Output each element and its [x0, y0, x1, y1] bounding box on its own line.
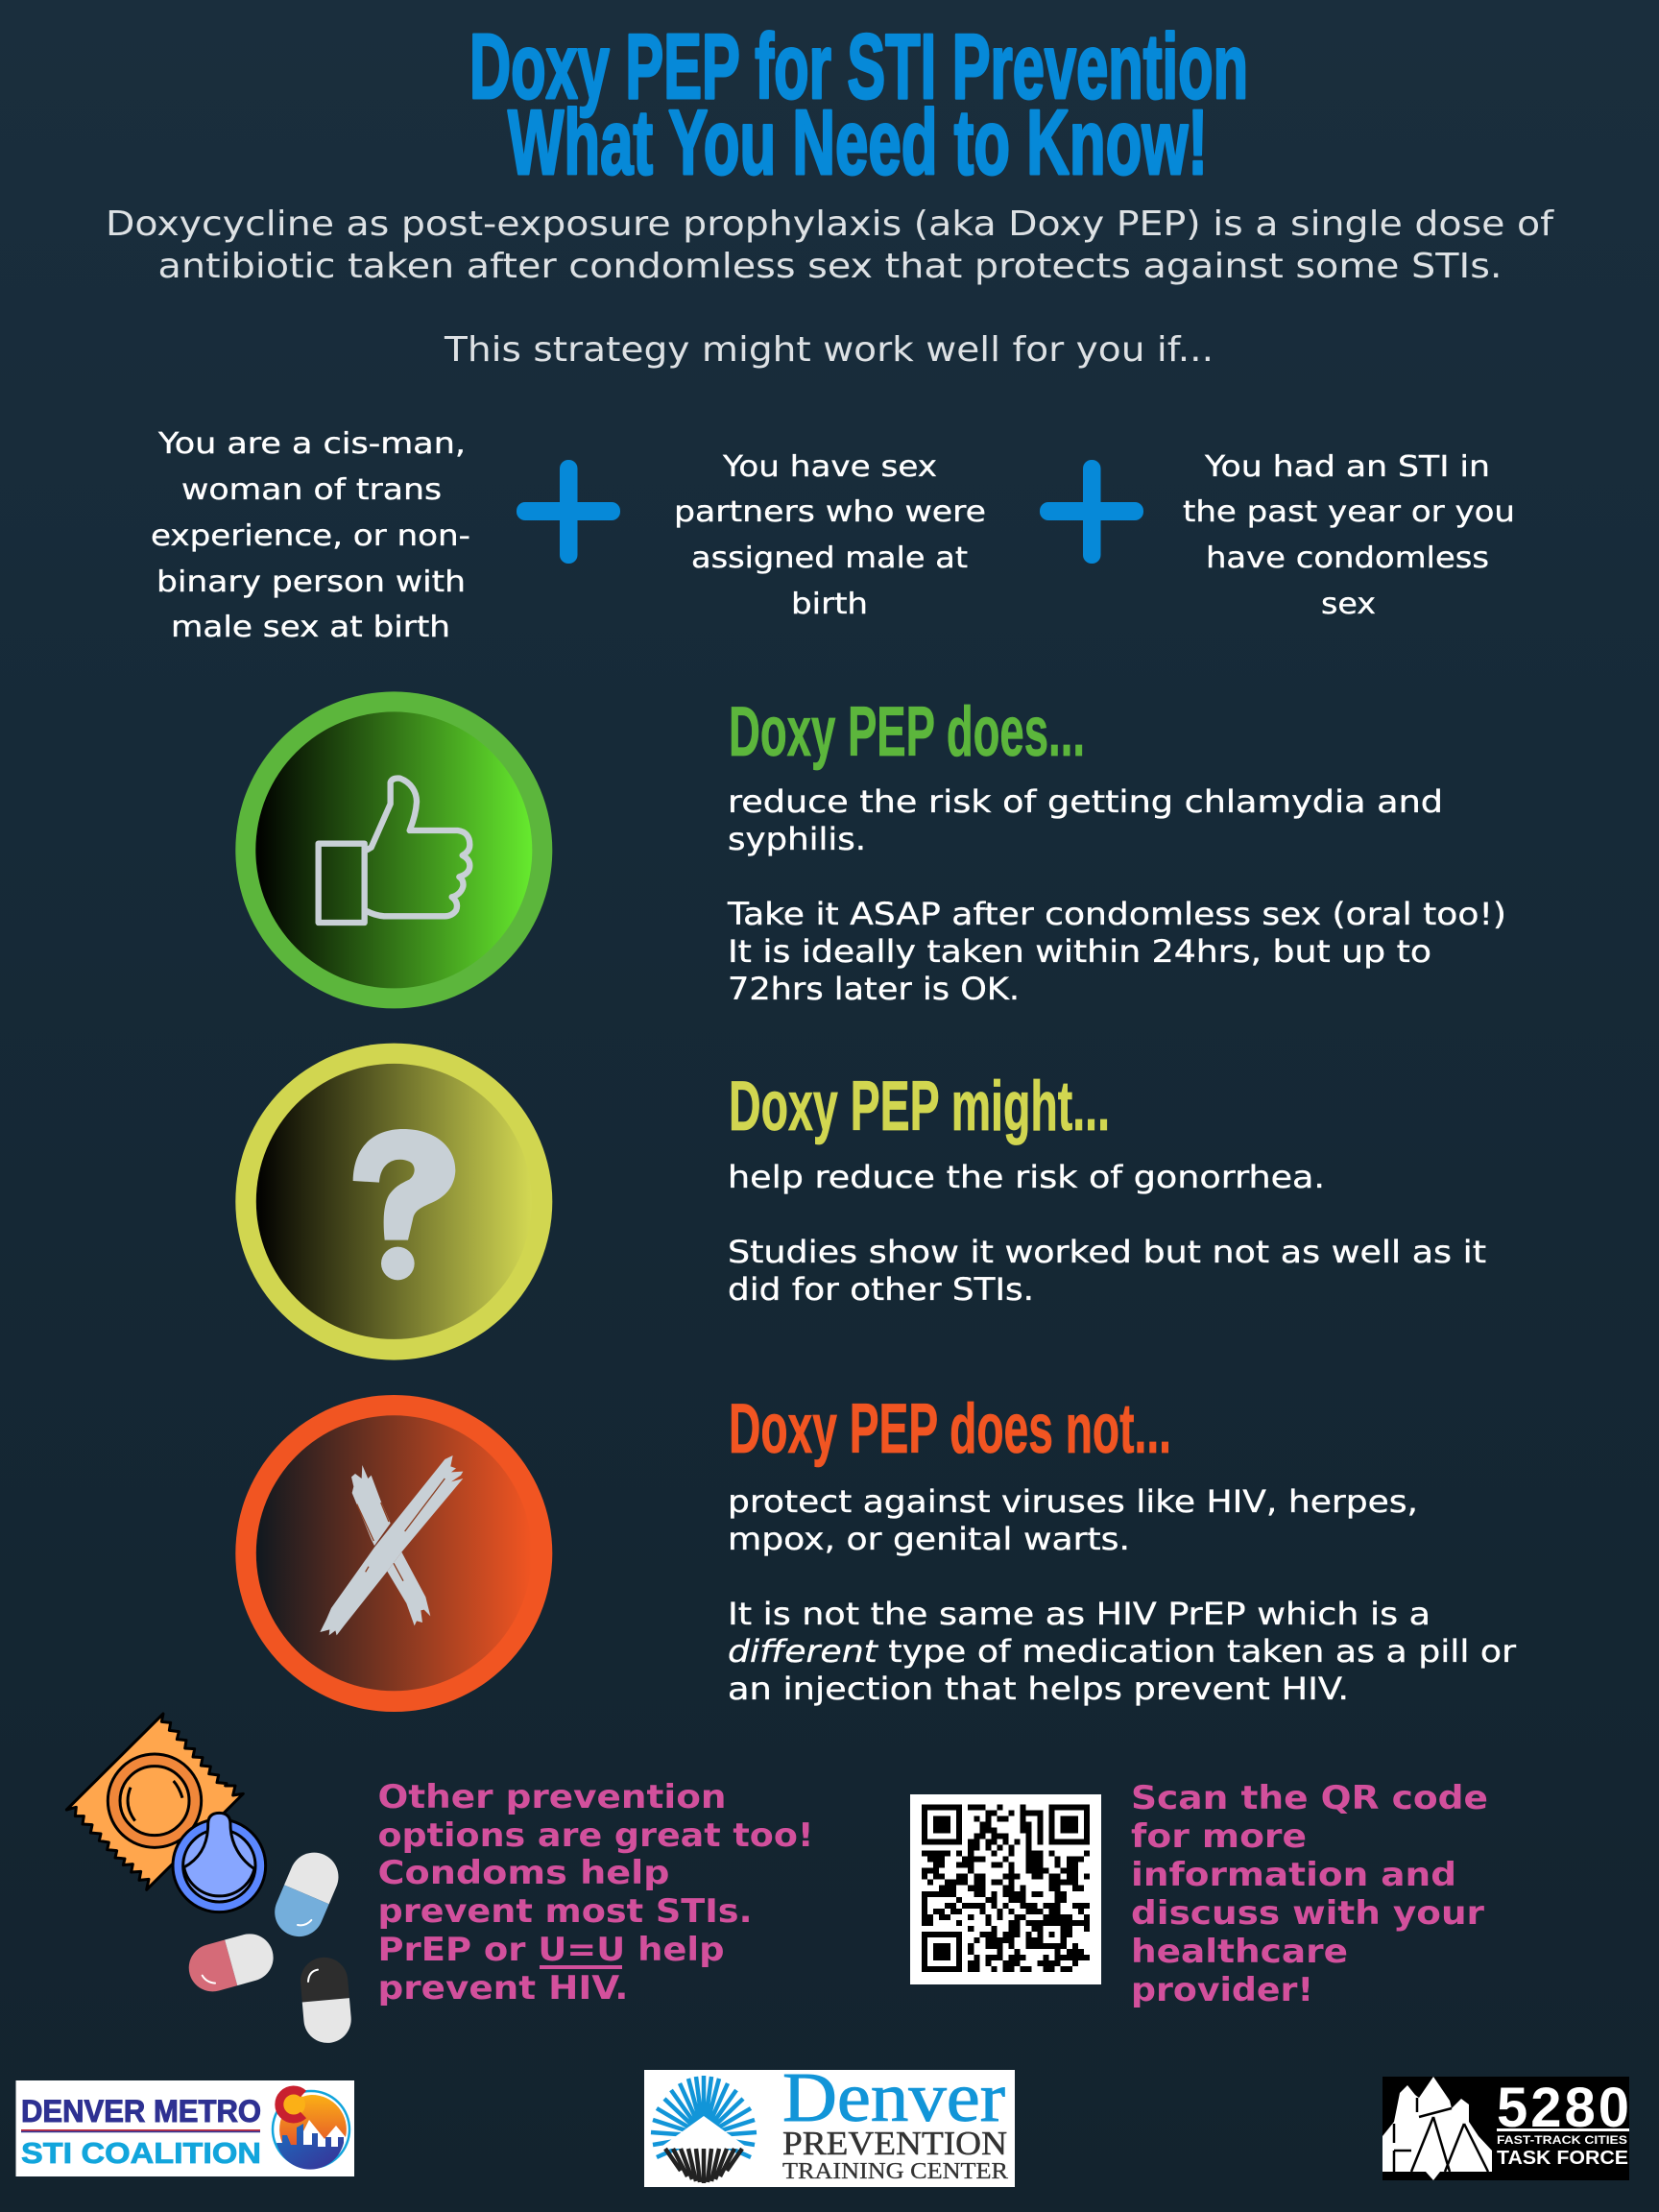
text: scan QR code: Scan the QR code — [1131, 1779, 1488, 1817]
logo: Denver Prevention Training Center: TRAINING CENTER — [782, 2159, 1008, 2184]
text: does not: protect against viruses like HIV, herpes, — [728, 1483, 1418, 1520]
plus icon — [1040, 460, 1143, 564]
logo: 5280 Fast-Track Cities Task Force: 5280 — [1497, 2077, 1629, 2139]
condom wrapper — [66, 1714, 243, 1889]
text: scan QR code: provider! — [1131, 1971, 1313, 2009]
logo: Denver Metro STI Coalition — [15, 2080, 354, 2176]
text: scan QR code: for more — [1131, 1817, 1307, 1856]
criterion: recent STI: sex — [1321, 588, 1376, 621]
black capsule — [299, 1956, 353, 2045]
sunburst mark — [651, 2076, 757, 2183]
criterion: recent STI: You had an STI in — [1204, 450, 1490, 484]
blue capsule — [267, 1845, 346, 1944]
logo: Denver Prevention Training Center: PREVENTION — [782, 2125, 1007, 2162]
logo: Denver Metro STI Coalition: STI COALITION — [21, 2136, 261, 2170]
intro text: Doxycycline as post-exposure prophylaxis (aka Doxy PEP) is a single dose of — [106, 204, 1554, 244]
logo: 5280 Fast-Track Cities Task Force — [1382, 2077, 1629, 2180]
text: does not: mpox, or genital warts. — [728, 1521, 1130, 1557]
text: scan QR code — [1131, 1779, 1488, 2009]
icon: thumbs up badge — [235, 691, 552, 1008]
criterion: recent STI — [1183, 450, 1515, 621]
criterion: identity: You are a cis-man, — [157, 427, 466, 461]
icon: X badge — [235, 1395, 552, 1712]
text: other prevention options: options are great too! — [378, 1816, 814, 1855]
unrolled condom — [173, 1813, 266, 1912]
criterion: partners: You have sex — [722, 450, 937, 484]
heading: does: Doxy PEP does... — [729, 693, 1085, 771]
text: might: Studies show it worked but not as well as it — [728, 1234, 1486, 1270]
logo: Denver Prevention Training Center — [644, 2058, 1015, 2187]
text: other prevention options: PrEP or U=U help — [378, 1931, 724, 1969]
plus icon — [517, 460, 620, 564]
heading: might: Doxy PEP might... — [729, 1068, 1110, 1145]
logo: 5280 Fast-Track Cities Task Force: FAST-TRACK CITIES — [1497, 2133, 1627, 2147]
text: other prevention options: Condoms help — [378, 1854, 670, 1892]
intro text — [106, 204, 1554, 286]
Colorado emblem — [273, 2090, 349, 2170]
intro text: antibiotic taken after condomless sex that protects against some STIs. — [157, 247, 1503, 286]
text: might: help reduce the risk of gonorrhea. — [728, 1159, 1325, 1195]
logo: 5280 Fast-Track Cities Task Force: TASK FORCE — [1497, 2148, 1628, 2169]
criterion: partners: assigned male at — [691, 541, 968, 575]
text: does: It is ideally taken within 24hrs, but up to — [728, 933, 1431, 970]
text: does not: It is not the same as HIV PrEP which is a — [728, 1596, 1431, 1632]
mountains mark — [1382, 2077, 1492, 2180]
criterion: partners: birth — [791, 588, 868, 621]
title — [469, 15, 1248, 194]
strategy lead-in: This strategy might work well for you if... — [444, 330, 1214, 370]
icon: condom and pills illustration — [66, 1714, 353, 2045]
title: What You Need to Know! — [508, 91, 1208, 194]
text: does: reduce the risk of getting chlamydia and — [728, 783, 1443, 820]
text: does: 72hrs later is OK. — [728, 971, 1020, 1007]
QR code — [910, 1794, 1101, 1984]
logo: Denver Metro STI Coalition: DENVER METRO — [21, 2094, 261, 2128]
text: does not: different type of medication taken as a pill or — [728, 1633, 1517, 1670]
criterion: partners — [674, 450, 986, 621]
text: does: Take it ASAP after condomless sex (oral too!) — [727, 896, 1506, 932]
criterion: recent STI: have condomless — [1206, 541, 1489, 575]
text: might: did for other STIs. — [728, 1271, 1034, 1308]
text: does not: an injection that helps prevent HIV. — [728, 1671, 1349, 1707]
criterion: identity: experience, or non- — [151, 519, 470, 553]
text: scan QR code: information and — [1131, 1856, 1456, 1894]
text: other prevention options: Other prevention — [378, 1778, 726, 1816]
text: other prevention options: prevent HIV. — [378, 1969, 628, 2008]
text: scan QR code: discuss with your — [1131, 1894, 1484, 1933]
criterion: partners: partners who were — [674, 495, 986, 529]
criterion: recent STI: the past year or you — [1183, 495, 1515, 529]
text: does — [727, 783, 1506, 1007]
icon: question mark badge — [235, 1044, 552, 1360]
criterion: identity: male sex at birth — [171, 611, 450, 644]
criterion: identity: binary person with — [156, 565, 466, 599]
text: might — [728, 1159, 1486, 1308]
text: other prevention options: prevent most STIs. — [378, 1892, 753, 1931]
text: scan QR code: healthcare — [1131, 1933, 1348, 1971]
criterion: identity — [151, 427, 470, 644]
heading: does not: Doxy PEP does not... — [729, 1390, 1171, 1468]
text: does not — [728, 1483, 1517, 1707]
criterion: identity: woman of trans — [181, 473, 442, 507]
text: does: syphilis. — [728, 821, 866, 857]
logo: Denver Prevention Training Center: Denver — [782, 2058, 1005, 2136]
pink capsule — [183, 1929, 278, 1997]
text: other prevention options — [378, 1778, 814, 2008]
